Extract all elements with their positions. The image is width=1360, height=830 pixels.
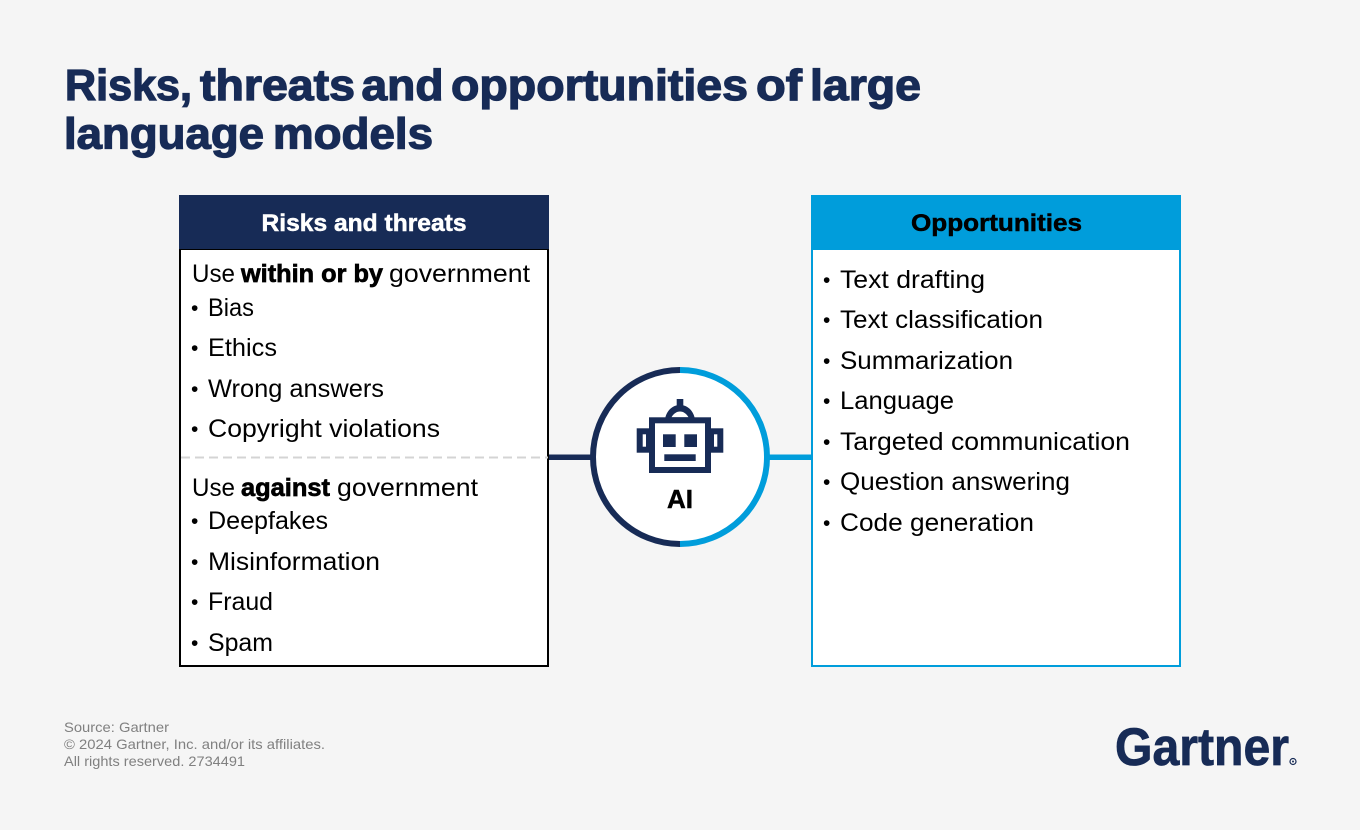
list: opportunities: Question answering — [840, 468, 1070, 496]
list: against government risks: • — [191, 632, 198, 655]
source note: All rights reserved. 2734491 — [64, 753, 245, 769]
list: opportunities: • — [823, 350, 830, 373]
list: within or by government risks: Ethics — [208, 334, 277, 362]
title: language — [64, 110, 264, 158]
list: against government risks: • — [191, 510, 198, 533]
list: opportunities: • — [823, 431, 830, 454]
text: use against government: Use — [192, 474, 235, 502]
icon: robot — [640, 399, 720, 470]
logo: Gartner: Gartner — [1115, 718, 1289, 777]
title: large — [810, 62, 921, 110]
list: within or by government risks: Wrong answers — [208, 375, 384, 403]
list: opportunities: • — [823, 309, 830, 332]
panel header: risks and threats: Risks and threats — [262, 210, 466, 237]
list: opportunities: Language — [840, 387, 954, 415]
list: within or by government risks: Copyright violations — [208, 415, 440, 443]
list: opportunities: • — [823, 471, 830, 494]
list: within or by government risks: • — [191, 337, 198, 360]
list: within or by government risks: • — [191, 378, 198, 401]
text: use within or by government: within or by — [240, 260, 383, 288]
list: within or by government risks: Bias — [208, 294, 254, 322]
list: opportunities: Targeted communication — [840, 428, 1130, 456]
list: opportunities: Summarization — [840, 347, 1013, 375]
panel header: risks and threats — [179, 195, 549, 249]
text: use within or by government: government — [389, 260, 530, 288]
text: use within or by government — [192, 260, 530, 288]
list: against government risks — [191, 507, 380, 657]
text: use within or by government: Use — [192, 260, 235, 288]
list: opportunities: Text drafting — [840, 266, 985, 294]
list: against government risks: • — [191, 551, 198, 574]
list: against government risks: Deepfakes — [208, 507, 328, 535]
text: use against government — [192, 474, 478, 502]
list: against government risks: • — [191, 591, 198, 614]
panel: risks and threats — [179, 195, 549, 666]
panel header: opportunities — [811, 195, 1181, 249]
list: within or by government risks: • — [191, 297, 198, 320]
title: threats — [200, 62, 355, 110]
title — [64, 62, 921, 158]
list: against government risks: Fraud — [208, 588, 273, 616]
list: within or by government risks — [191, 294, 440, 443]
list: opportunities — [823, 266, 1130, 537]
list: opportunities: • — [823, 390, 830, 413]
source note: Source: Gartner — [64, 719, 169, 735]
AI hub — [593, 370, 767, 544]
text: use against government: against — [241, 474, 331, 502]
list: opportunities: • — [823, 269, 830, 292]
title: Risks, — [65, 62, 192, 110]
list: against government risks: Misinformation — [208, 548, 380, 576]
panel: opportunities — [811, 195, 1181, 666]
panel header: opportunities: Opportunities — [911, 210, 1082, 237]
list: against government risks: Spam — [208, 629, 273, 657]
label: AI: AI — [667, 484, 693, 514]
source note: © 2024 Gartner, Inc. and/or its affiliates. — [64, 736, 325, 752]
title: opportunities — [451, 62, 748, 110]
text: use against government: government — [337, 474, 478, 502]
list: opportunities: Code generation — [840, 509, 1034, 537]
list: opportunities: Text classification — [840, 306, 1043, 334]
title: and — [362, 62, 444, 110]
connector: risks to AI — [548, 454, 592, 460]
list: within or by government risks: • — [191, 418, 198, 441]
source note — [64, 719, 325, 769]
list: opportunities: • — [823, 512, 830, 535]
title: of — [756, 62, 803, 110]
title: models — [273, 110, 433, 158]
connector: AI to opportunities — [768, 454, 812, 460]
